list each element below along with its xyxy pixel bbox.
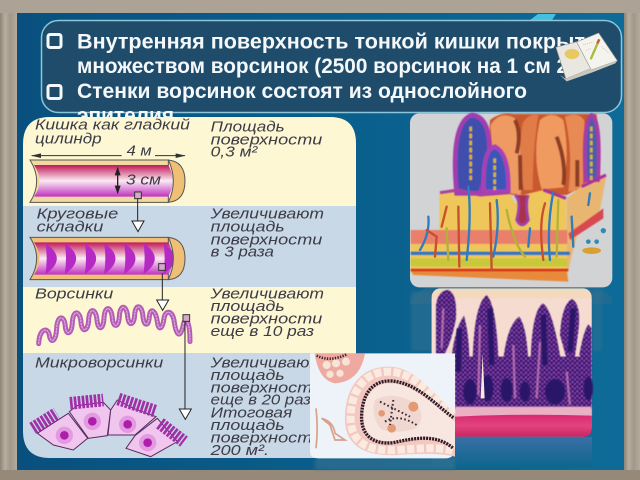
small glands [582,228,606,254]
panel: surface-area diagram [23,116,356,459]
label: increase 10 times [209,285,324,340]
label: increase 20 times, total 200: поверхности [211,379,323,396]
label: increase 3 times: поверхности [211,231,323,248]
label: increase 20 times, total 200: поверхности [211,429,323,446]
label: increase 10 times: еще в 10 раз [211,323,314,340]
text panel [42,20,622,128]
reflection below illustration [410,288,612,304]
left tissue fragments [316,408,345,448]
small round gland [315,353,365,383]
image: histology villi section [432,288,593,437]
label: increase 3 times: Увеличивают [209,205,324,222]
label: area 0.3: Площадь [211,119,285,136]
arrow: folds to villi [157,273,169,310]
icon: open book with pencil [556,33,617,81]
heading line 2: множеством ворсинок (2500 ворсинок на 1 см 2) [77,55,575,78]
label: area 0.3: поверхности [211,131,323,148]
label: increase 10 times: площадь [211,298,285,315]
label: increase 20 times, total 200: Итоговая [211,404,292,421]
icon: checkbox bullet 1 [48,34,61,48]
label: area 0.3 [211,119,323,161]
image: villus cross-section [310,353,455,458]
illustration: epithelial cells [33,399,184,457]
dimension: 4 m: 4 м [127,143,152,160]
orange villi [485,113,600,195]
arrow: villi to microvilli [179,321,191,419]
label: cylinder: цилиндр [35,130,102,147]
label: area 0.3: 0,3 м² [211,144,258,161]
label: circular folds: Круговые [37,205,118,222]
row: microvilli [33,321,324,459]
blood vessels [420,187,590,270]
label: smooth cylinder: Кишка как гладкий [35,116,191,133]
crypts [458,308,593,404]
label: increase 3 times: площадь [211,219,285,236]
purple villi mass [436,290,592,409]
dimension: 4 m [31,143,186,160]
light pink lumen [432,298,592,365]
label: villi: Ворсинки [35,285,114,302]
illustration: folded tube [30,237,185,280]
row: circular folds [30,199,324,280]
villus core [373,396,421,432]
row: smooth cylinder [30,116,323,202]
label: circular folds: складки [37,219,104,236]
label: increase 20 times, total 200 [209,355,324,459]
illustration: smooth tube: 3 см [126,171,161,188]
label: increase 20 times, total 200: Увеличивают [209,355,324,372]
label: increase 10 times: Увеличивают [209,285,324,302]
image: villi anatomy illustration [410,113,612,287]
heading line 1: Внутренняя поверхность тонкой кишки покрыта [77,30,597,54]
illustration: smooth tube [30,160,185,202]
arrow: cylinder to folds [132,199,144,232]
label: increase 3 times [209,205,324,261]
label: microvilli: Микроворсинки [35,355,164,372]
label: increase 20 times, total 200: еще в 20 раз. [211,391,316,408]
reflection below cross-section image [315,458,455,470]
submucosa band [455,407,592,417]
pink tissue streaks [442,308,570,405]
label: circular folds [37,205,118,236]
heading line 4: эпителия [77,104,174,128]
connective tissue block [411,174,606,282]
label: increase 20 times, total 200: 200 м². [209,442,269,459]
icon: checkbox bullet 2 [48,86,61,98]
label: increase 20 times, total 200: площадь [211,367,285,384]
light gap between crypts [481,353,485,398]
heading line 3: Стенки ворсинок состоят из однослойного [77,80,527,103]
purple cut villi [440,115,606,198]
muscle band [455,415,592,437]
diagram background bands [23,117,356,458]
label: increase 20 times, total 200: площадь [211,417,285,434]
villus body [345,367,455,457]
row: villi [35,273,324,344]
label: increase 10 times: поверхности [211,310,323,327]
label: increase 3 times: в 3 раза [211,244,274,261]
reflection below histology image [411,291,602,467]
illustration: wavy villi line [39,307,190,344]
